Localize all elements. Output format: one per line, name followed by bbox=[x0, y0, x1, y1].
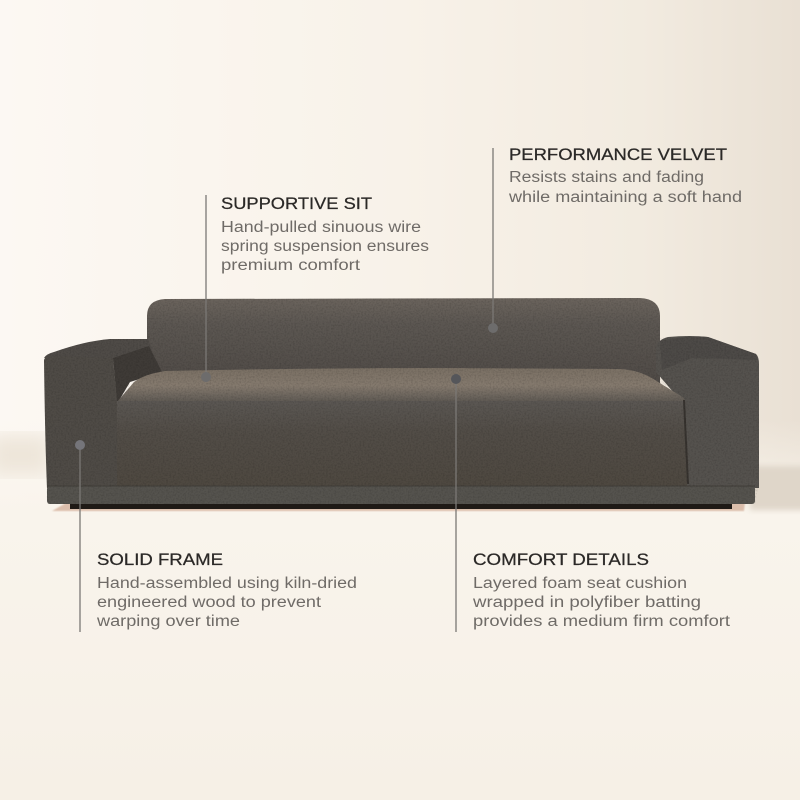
text: solid frame description: engineered wood to prevent bbox=[97, 594, 322, 611]
fabric texture bbox=[44, 298, 759, 504]
seat cushion top bbox=[117, 368, 686, 403]
sofa bbox=[44, 298, 759, 511]
callout: comfort details bbox=[451, 374, 731, 632]
leader line and dot: comfort details bbox=[451, 374, 461, 632]
text: supportive sit description: premium comfort bbox=[221, 257, 361, 274]
heading: performance velvet: PERFORMANCE VELVET bbox=[509, 146, 727, 164]
heading: solid frame: SOLID FRAME bbox=[97, 551, 223, 569]
left arm inner side bbox=[113, 346, 162, 404]
left arm front bbox=[44, 356, 117, 488]
text: supportive sit description: spring suspension ensures bbox=[221, 238, 429, 255]
text: supportive sit description: Hand-pulled sinuous wire bbox=[221, 219, 421, 236]
text: solid frame description: warping over time bbox=[96, 613, 240, 630]
text: supportive sit description bbox=[221, 219, 429, 274]
base plinth bbox=[47, 486, 755, 504]
leader line and dot: performance velvet bbox=[488, 148, 498, 333]
text: solid frame description: Hand-assembled using kiln-dried bbox=[97, 575, 357, 592]
seat front bbox=[117, 401, 687, 488]
text: comfort details description: Layered foam seat cushion bbox=[473, 575, 687, 592]
text: comfort details description: provides a medium firm comfort bbox=[473, 613, 731, 630]
seam right of seat bbox=[684, 400, 688, 484]
right arm top bbox=[660, 336, 758, 370]
leader line and dot: supportive sit bbox=[201, 195, 211, 382]
heading: supportive sit: SUPPORTIVE SIT bbox=[221, 195, 372, 213]
backrest bbox=[147, 298, 660, 385]
left arm top bbox=[44, 339, 152, 362]
leader line and dot: solid frame bbox=[75, 440, 85, 632]
callout: performance velvet bbox=[488, 146, 742, 333]
text: comfort details description: wrapped in polyfiber batting bbox=[472, 594, 701, 611]
floor shadow bbox=[52, 503, 745, 511]
text: solid frame description bbox=[96, 575, 357, 630]
callout: solid frame bbox=[75, 440, 357, 632]
text: performance velvet description: while maintaining a soft hand bbox=[508, 189, 742, 206]
callout: supportive sit bbox=[201, 195, 429, 382]
text: performance velvet description bbox=[508, 169, 742, 206]
heading: comfort details: COMFORT DETAILS bbox=[473, 551, 649, 569]
text: performance velvet description: Resists stains and fading bbox=[509, 169, 704, 186]
right arm bbox=[656, 336, 759, 488]
text: comfort details description bbox=[472, 575, 731, 630]
